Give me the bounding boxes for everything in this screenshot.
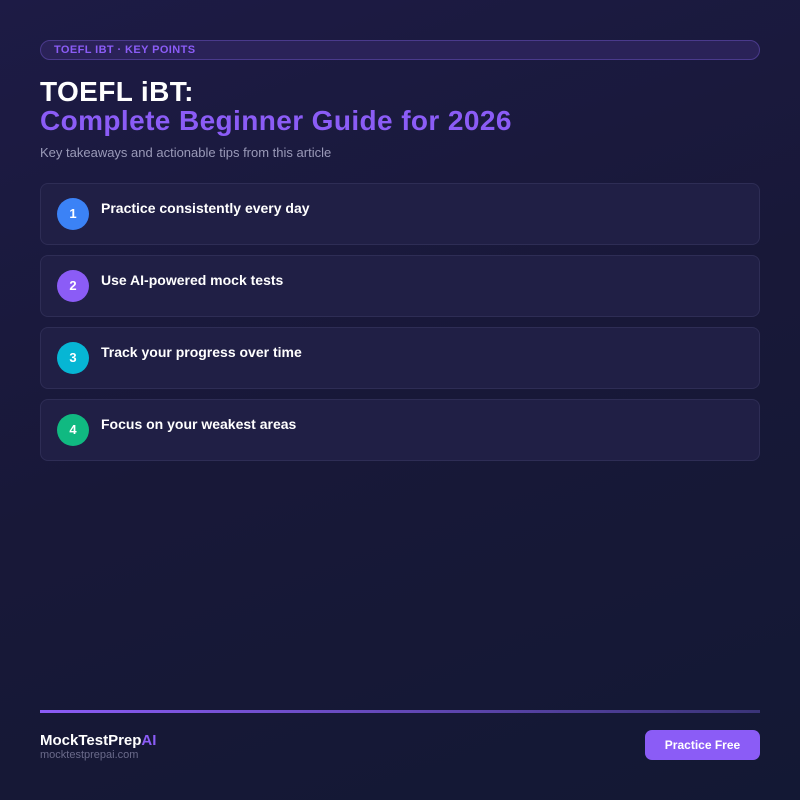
- card 4: [40, 399, 760, 461]
- card 4: 4: [69, 422, 77, 437]
- card 4: Focus on your weakest areas: [101, 416, 296, 432]
- card 1: 1: [69, 206, 77, 221]
- card 3: Track your progress over time: [101, 344, 302, 360]
- title line 2: Complete Beginner Guide for 2026: [40, 105, 512, 136]
- url: mocktestprepai.com: [40, 749, 138, 761]
- card 2: Use AI-powered mock tests: [101, 272, 283, 288]
- tag pill: [40, 40, 760, 60]
- card 1: [40, 183, 760, 245]
- card 3: 3: [69, 350, 77, 365]
- subtitle: Key takeaways and actionable tips from this article: [40, 145, 331, 160]
- button: [645, 730, 760, 760]
- title line 1: TOEFL iBT:: [40, 76, 194, 107]
- card 2: [40, 255, 760, 317]
- brand: MockTestPrepAI: [40, 732, 156, 749]
- card 1: Practice consistently every day: [101, 200, 310, 216]
- tag pill: TOEFL IBT · KEY POINTS: [54, 44, 195, 56]
- card 2: 2: [69, 278, 77, 293]
- button: Practice Free: [665, 738, 740, 752]
- card 3: [40, 327, 760, 389]
